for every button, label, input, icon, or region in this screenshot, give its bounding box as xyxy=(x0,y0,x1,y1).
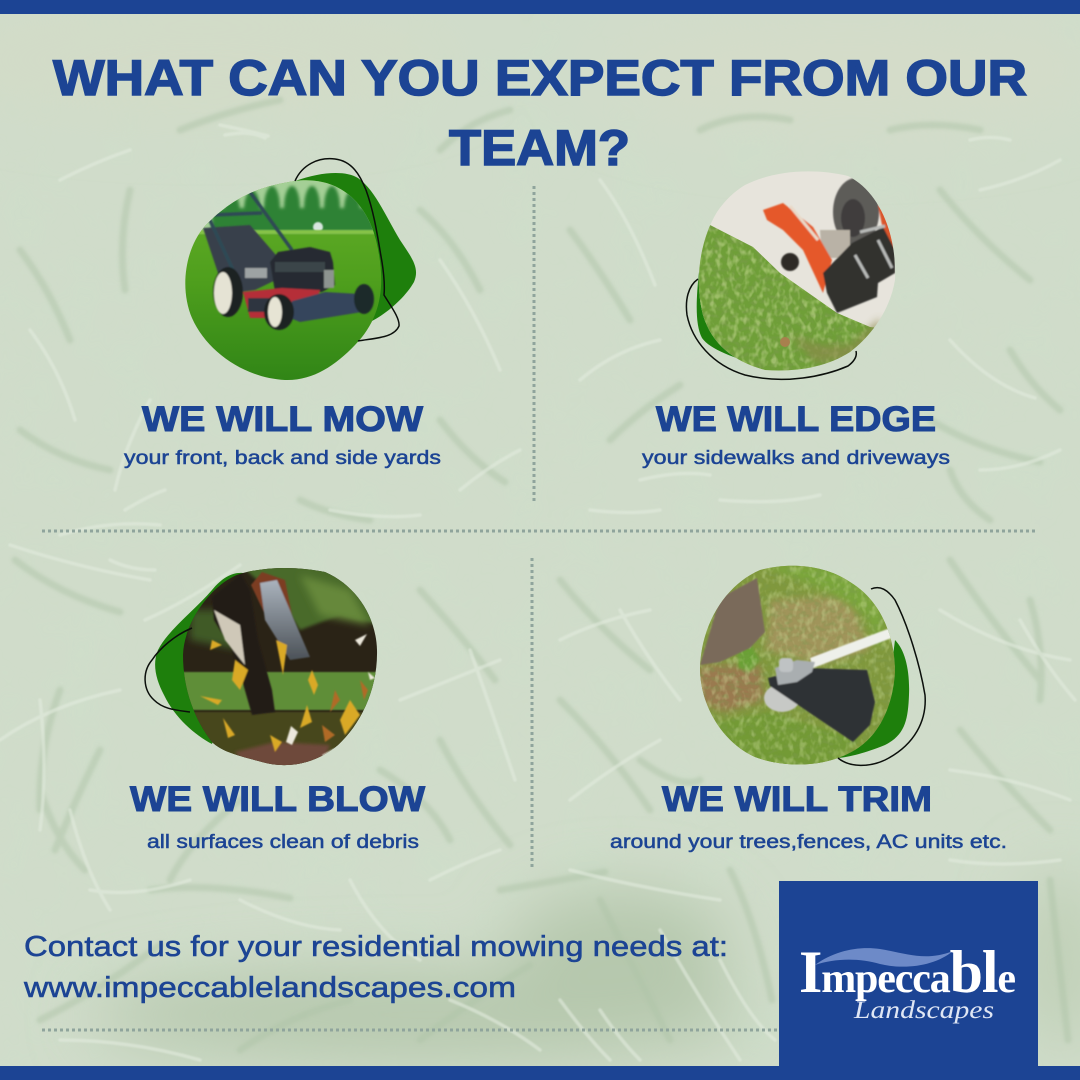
title: WHAT CAN YOU EXPECT FROM OUR xyxy=(53,50,1027,106)
divider: lower vertical xyxy=(530,558,534,868)
subtext: your sidewalks and driveways xyxy=(642,448,950,469)
subtext: around your trees,fences, AC units etc. xyxy=(610,832,1007,853)
contact text xyxy=(23,931,728,1004)
contact text: www.impeccablelandscapes.com xyxy=(23,972,516,1004)
top bar xyxy=(0,0,1080,14)
icon: green blob behind blower photo xyxy=(155,573,243,744)
divider: horizontal middle xyxy=(42,530,1038,532)
subtext: all surfaces clean of debris xyxy=(147,832,419,853)
icon: green blob behind mower photo xyxy=(295,173,416,322)
divider: footer horizontal xyxy=(42,1028,779,1032)
outline: black curve around trimmer photo xyxy=(838,588,925,765)
subtext: your front, back and side yards xyxy=(124,448,441,469)
panel: we will blow xyxy=(130,565,425,853)
outline: black curve around mower photo xyxy=(295,159,399,341)
heading: WE WILL TRIM xyxy=(662,780,932,819)
contact text: Contact us for your residential mowing needs at: xyxy=(24,931,728,963)
logo wordmark: Impeccable xyxy=(799,939,1016,1005)
panel: we will trim xyxy=(610,560,1007,853)
photo: string trimmer xyxy=(700,566,895,764)
heading: WE WILL MOW xyxy=(142,400,423,439)
photo: leaf blower xyxy=(180,565,380,770)
heading: WE WILL EDGE xyxy=(656,400,936,439)
heading: WE WILL BLOW xyxy=(130,780,425,819)
title: TEAM? xyxy=(449,120,630,176)
photo: lawn mower xyxy=(185,180,382,380)
bottom bar xyxy=(0,1066,1080,1080)
panel: we will edge xyxy=(642,165,950,469)
outline: black curve around edger photo xyxy=(686,279,856,379)
icon: green blob behind edger photo xyxy=(697,272,782,370)
logo script: Landscapes xyxy=(853,997,994,1024)
panel: we will mow xyxy=(124,159,441,469)
icon: green blob behind trimmer photo xyxy=(838,640,909,758)
title xyxy=(53,50,1027,176)
photo: lawn edger xyxy=(698,172,896,370)
outline: black curve around blower photo xyxy=(145,628,192,712)
logo: impeccable landscapes xyxy=(779,881,1038,1066)
icon: logo wave xyxy=(815,948,953,967)
divider: upper vertical xyxy=(532,186,536,503)
